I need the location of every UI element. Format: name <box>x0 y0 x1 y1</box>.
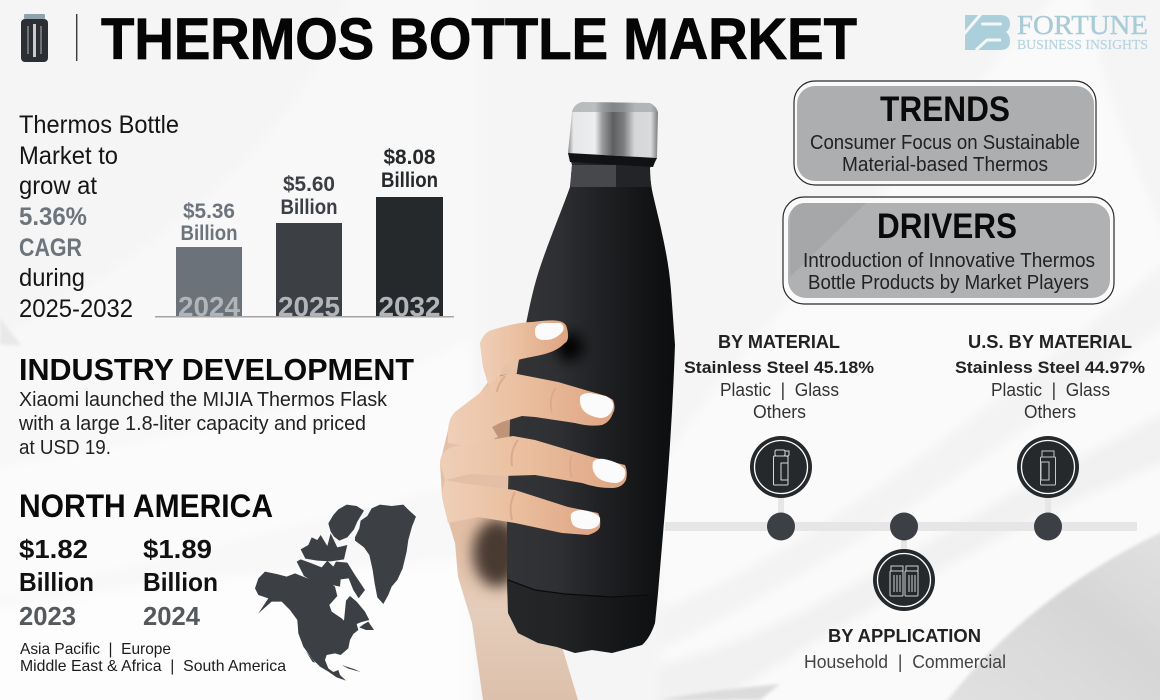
bar 2025: Billion <box>280 196 338 219</box>
segment: by application <box>804 626 1006 672</box>
panel: trends: Consumer Focus on Sustainable <box>810 132 1080 154</box>
bar 2032 <box>376 146 443 322</box>
growth statement: during <box>19 264 85 292</box>
bar 2024 <box>176 200 242 322</box>
text block: other regions <box>20 641 286 675</box>
finger: index <box>480 320 568 384</box>
stat: 2023: $1.82 <box>19 534 88 564</box>
segment: by application: BY APPLICATION <box>828 626 981 646</box>
text block: industry development: with a large 1.8-liter capacity and priced <box>18 413 366 435</box>
logo: Fortune Business Insights: BUSINESS INSIGHTS <box>1017 38 1148 53</box>
icon: by application bottles <box>873 549 935 611</box>
palm and forearm <box>440 340 578 700</box>
bar 2024: Billion <box>180 222 238 245</box>
title: THERMOS BOTTLE MARKET <box>101 7 857 72</box>
growth statement: 2025-2032 <box>19 295 133 323</box>
stat: 2023 <box>19 534 94 631</box>
bottle neck ring <box>568 153 657 167</box>
text block: industry development <box>18 389 388 459</box>
segment: U.S. by material: Others <box>1024 402 1076 422</box>
stat: 2023: Billion <box>19 567 94 597</box>
stat: 2023: 2023 <box>19 601 76 631</box>
segment: by material: Plastic | Glass <box>720 380 839 400</box>
segment: by material: Stainless Steel 45.18% <box>684 358 874 377</box>
icon: by material bottle <box>750 436 812 498</box>
segment: by material: BY MATERIAL <box>718 332 840 352</box>
growth statement: grow at <box>19 172 97 200</box>
panel: drivers: Bottle Products by Market Players <box>808 272 1089 294</box>
bar chart: market size <box>155 146 454 322</box>
growth statement: CAGR <box>19 234 82 262</box>
text block: industry development: at USD 19. <box>19 437 111 459</box>
stat: 2024: Billion <box>143 567 218 597</box>
growth statement: Market to <box>19 142 118 170</box>
logo: Fortune Business Insights: FORTUNE <box>1017 10 1148 40</box>
panel: drivers <box>783 197 1114 304</box>
finger: little <box>442 480 600 535</box>
illustration: hand holding bottle <box>440 102 677 700</box>
logo: Fortune Business Insights <box>964 10 1148 53</box>
finger: ring <box>440 436 627 488</box>
bar 2024: 2024 <box>178 291 240 322</box>
heading: industry development: INDUSTRY DEVELOPMENT <box>19 352 414 387</box>
bar 2032: Billion <box>381 169 438 192</box>
growth statement <box>19 111 179 323</box>
bottle base seam <box>508 580 648 597</box>
finger: middle <box>448 373 614 447</box>
segment: by material <box>684 332 874 422</box>
stat: 2024: $1.89 <box>143 534 212 564</box>
text block: other regions: Middle East & Africa | South America <box>20 658 286 675</box>
text block: other regions: Asia Pacific | Europe <box>20 641 171 658</box>
growth statement: Thermos Bottle <box>19 111 179 139</box>
bar 2032: $8.08 <box>384 146 436 169</box>
bar 2025 <box>276 173 342 322</box>
panel: trends <box>794 81 1096 185</box>
segment: by application: Household | Commercial <box>804 652 1006 672</box>
bar 2025: $5.60 <box>283 173 335 196</box>
panel: drivers: DRIVERS <box>877 207 1017 246</box>
stat: 2024 <box>143 534 218 631</box>
text block: industry development: Xiaomi launched the MIJIA Thermos Flask <box>19 389 388 411</box>
panel: trends: Material-based Thermos <box>842 154 1048 176</box>
timeline connector <box>665 497 1137 554</box>
stat: 2024: 2024 <box>143 601 201 631</box>
panel: trends: TRENDS <box>880 90 1010 129</box>
bar 2024: $5.36 <box>183 200 235 223</box>
growth statement: 5.36% <box>19 203 87 231</box>
map: North America <box>255 505 416 681</box>
bar 2025: 2025 <box>278 291 340 322</box>
bottle body <box>505 155 677 655</box>
segment: U.S. by material: Plastic | Glass <box>991 380 1110 400</box>
icon: thermos header <box>21 14 48 62</box>
icon: U.S. material bottle <box>1017 436 1079 498</box>
segment: U.S. by material <box>955 332 1145 422</box>
header divider <box>76 14 77 61</box>
timeline dots <box>767 512 1062 540</box>
segment: by material: Others <box>753 402 806 422</box>
segment: U.S. by material: Stainless Steel 44.97% <box>955 358 1145 377</box>
heading: north america: NORTH AMERICA <box>19 488 273 524</box>
segment: U.S. by material: U.S. BY MATERIAL <box>968 332 1132 352</box>
bottle cap <box>568 102 658 158</box>
bar 2032: 2032 <box>378 291 440 322</box>
panel: drivers: Introduction of Innovative Thermos <box>803 250 1095 272</box>
